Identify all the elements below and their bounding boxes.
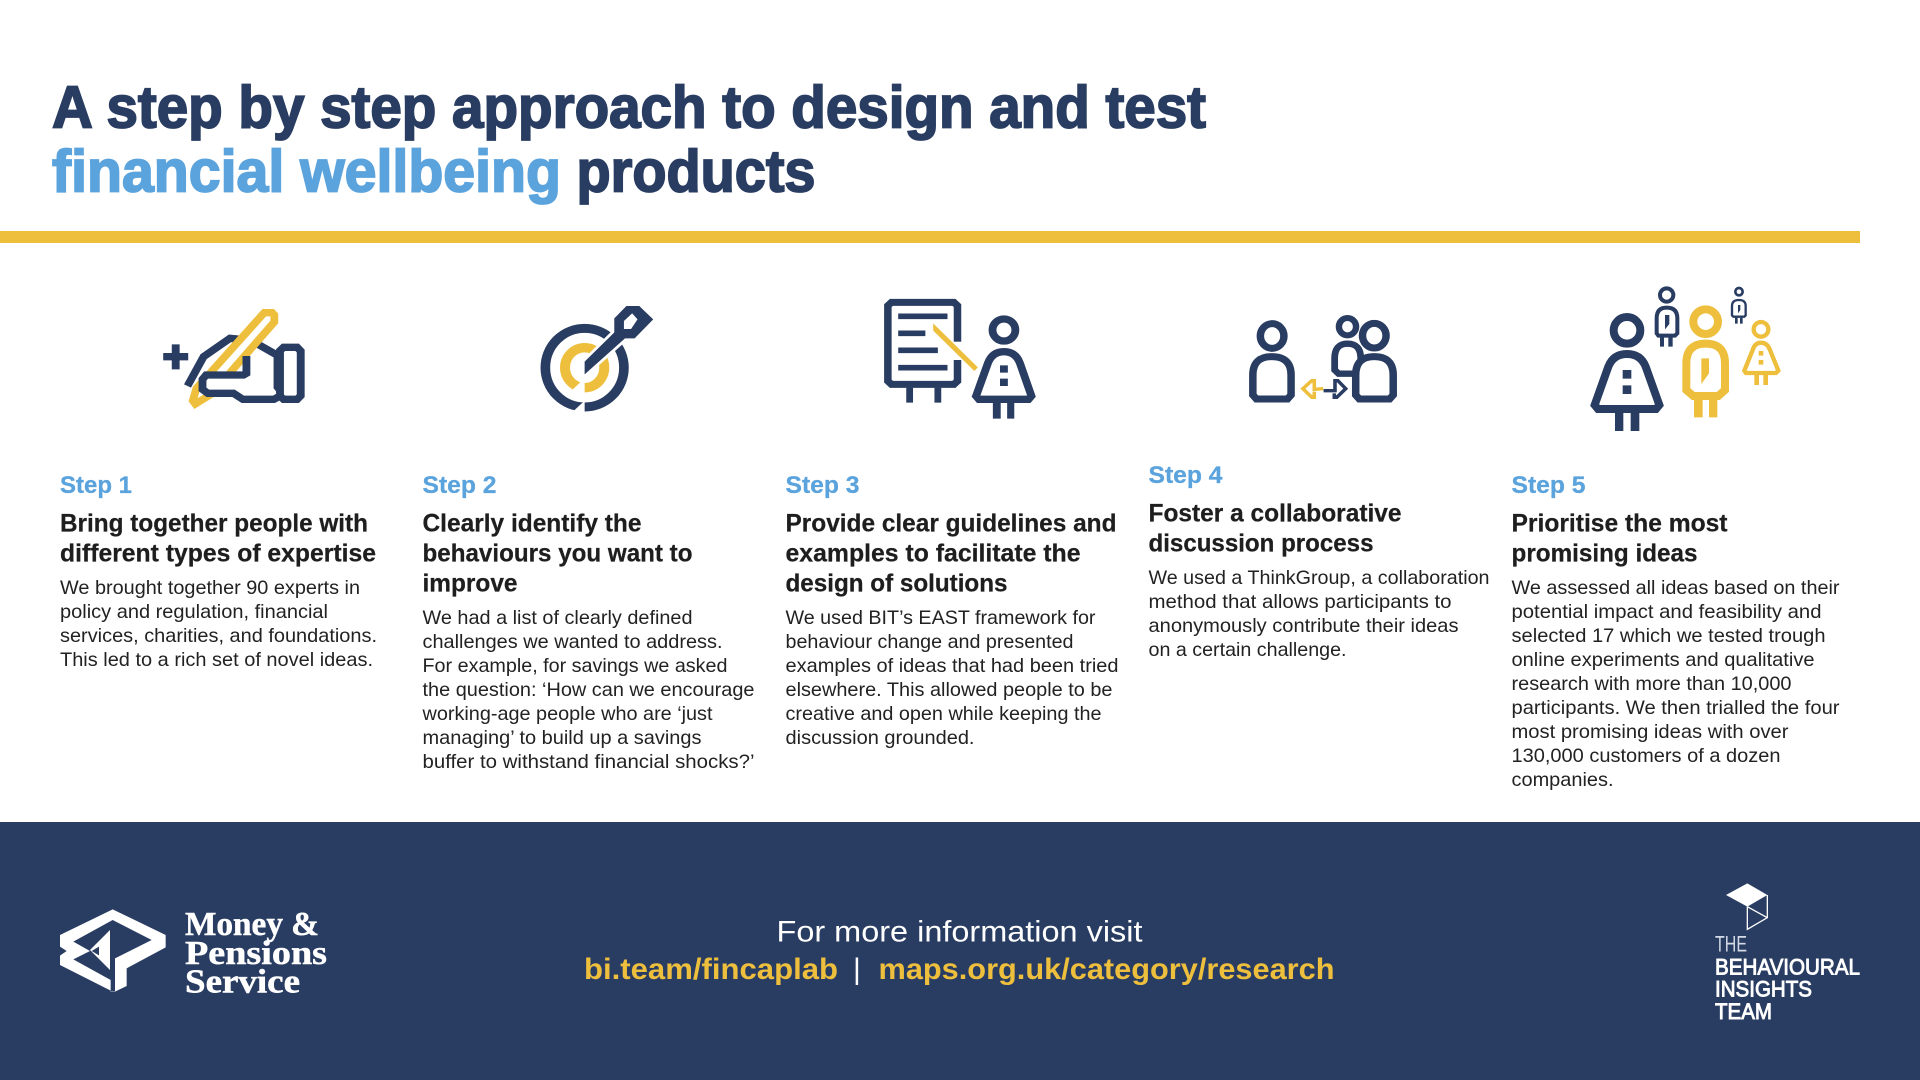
logo: The Behavioural Insights Team: TEAM xyxy=(1715,999,1772,1024)
heading xyxy=(1512,510,1728,568)
heading: improve xyxy=(422,570,518,598)
logo: Money & Pensions Service xyxy=(60,906,327,1000)
body text: We assessed all ideas based on their xyxy=(1512,577,1840,599)
logo: Money & Pensions Service: Pensions xyxy=(185,935,327,972)
heading: different types of expertise xyxy=(60,540,376,568)
panel: step 1 xyxy=(60,313,377,671)
body text: companies. xyxy=(1512,769,1614,791)
call to action: | xyxy=(853,953,861,986)
heading: promising ideas xyxy=(1512,540,1698,568)
heading: Foster a collaborative xyxy=(1148,500,1402,528)
call to action: bi.team/fincaplab xyxy=(584,953,838,986)
body text: selected 17 which we tested trough xyxy=(1512,625,1826,647)
body text xyxy=(421,607,754,773)
body text: We brought together 90 experts in xyxy=(60,577,360,599)
call to action xyxy=(584,916,1334,986)
icon: people exchanging ideas xyxy=(1253,318,1393,399)
step label: Step 5 xyxy=(1512,472,1586,499)
body text: anonymously contribute their ideas xyxy=(1148,615,1459,637)
heading: discussion process xyxy=(1148,530,1374,558)
logo mark xyxy=(1726,883,1767,929)
body text: 130,000 customers of a dozen xyxy=(1512,745,1780,767)
title: products xyxy=(576,138,816,204)
body text: creative and open while keeping the xyxy=(786,703,1102,725)
logo: The Behavioural Insights Team xyxy=(1715,883,1860,1024)
body text xyxy=(1148,567,1490,661)
call to action: For more information visit xyxy=(776,916,1143,948)
icon: group of people xyxy=(1595,288,1778,431)
heading: Bring together people with xyxy=(60,510,368,538)
body text: online experiments and qualitative xyxy=(1512,649,1814,671)
body text: participants. We then trialled the four xyxy=(1512,697,1840,719)
body text: research with more than 10,000 xyxy=(1512,673,1792,695)
body text: discussion grounded. xyxy=(786,727,974,749)
body text: services, charities, and foundations. xyxy=(60,625,377,647)
body text: examples of ideas that had been tried xyxy=(786,655,1118,677)
heading: design of solutions xyxy=(786,570,1008,598)
call to action: maps.org.uk/category/research xyxy=(878,953,1334,986)
title xyxy=(52,74,1206,204)
body text: elsewhere. This allowed people to be xyxy=(786,679,1112,701)
icon: hand writing with pencil xyxy=(163,313,301,404)
body text: We used BIT’s EAST framework for xyxy=(786,607,1096,629)
logo: The Behavioural Insights Team: THE xyxy=(1715,932,1747,957)
heading: examples to facilitate the xyxy=(786,540,1081,568)
body text: We had a list of clearly defined xyxy=(422,607,692,629)
body text: the question: ‘How can we encourage xyxy=(422,679,754,701)
body text: For example, for savings we asked xyxy=(422,655,728,677)
body text: most promising ideas with over xyxy=(1512,721,1789,743)
icon: woman presenting at a board xyxy=(888,302,1031,419)
panel: step 4 xyxy=(1148,318,1490,661)
panel: step 2 xyxy=(421,306,754,773)
heading: behaviours you want to xyxy=(422,540,692,568)
body text: method that allows participants to xyxy=(1148,591,1452,613)
logo mark xyxy=(60,909,166,992)
body text: This led to a rich set of novel ideas. xyxy=(60,649,373,671)
logo: The Behavioural Insights Team: BEHAVIOURAL xyxy=(1715,954,1860,979)
panel: step 3 xyxy=(786,302,1118,749)
footer band xyxy=(0,822,1920,1080)
body text: We used a ThinkGroup, a collaboration xyxy=(1148,567,1490,589)
body text: working-age people who are ‘just xyxy=(421,703,713,725)
step label: Step 1 xyxy=(60,472,132,499)
body text: buffer to withstand financial shocks?’ xyxy=(422,751,754,773)
logo: Money & Pensions Service: Money & xyxy=(185,906,319,943)
body text xyxy=(786,607,1118,749)
step label: Step 3 xyxy=(786,472,860,499)
step label: Step 2 xyxy=(422,472,496,499)
title: A step by step approach to design and test xyxy=(52,74,1206,140)
body text: challenges we wanted to address. xyxy=(422,631,722,653)
heading xyxy=(60,510,376,568)
body text: behaviour change and presented xyxy=(786,631,1074,653)
panel: step 5 xyxy=(1512,288,1840,791)
heading xyxy=(786,510,1116,598)
heading xyxy=(1148,500,1402,558)
heading: Prioritise the most xyxy=(1512,510,1728,538)
heading xyxy=(422,510,692,598)
step label: Step 4 xyxy=(1148,462,1223,489)
heading: Provide clear guidelines and xyxy=(786,510,1116,538)
logo: Money & Pensions Service: Service xyxy=(185,964,300,1000)
body text: managing’ to build up a savings xyxy=(422,727,702,749)
body text xyxy=(60,577,377,671)
body text: potential impact and feasibility and xyxy=(1512,601,1822,623)
body text: policy and regulation, financial xyxy=(60,601,328,623)
body text: on a certain challenge. xyxy=(1148,639,1346,661)
title: financial wellbeing xyxy=(52,138,561,204)
logo: The Behavioural Insights Team: INSIGHTS xyxy=(1715,977,1812,1002)
icon: dart in target xyxy=(545,306,653,415)
heading: Clearly identify the xyxy=(422,510,642,538)
body text xyxy=(1512,577,1840,791)
